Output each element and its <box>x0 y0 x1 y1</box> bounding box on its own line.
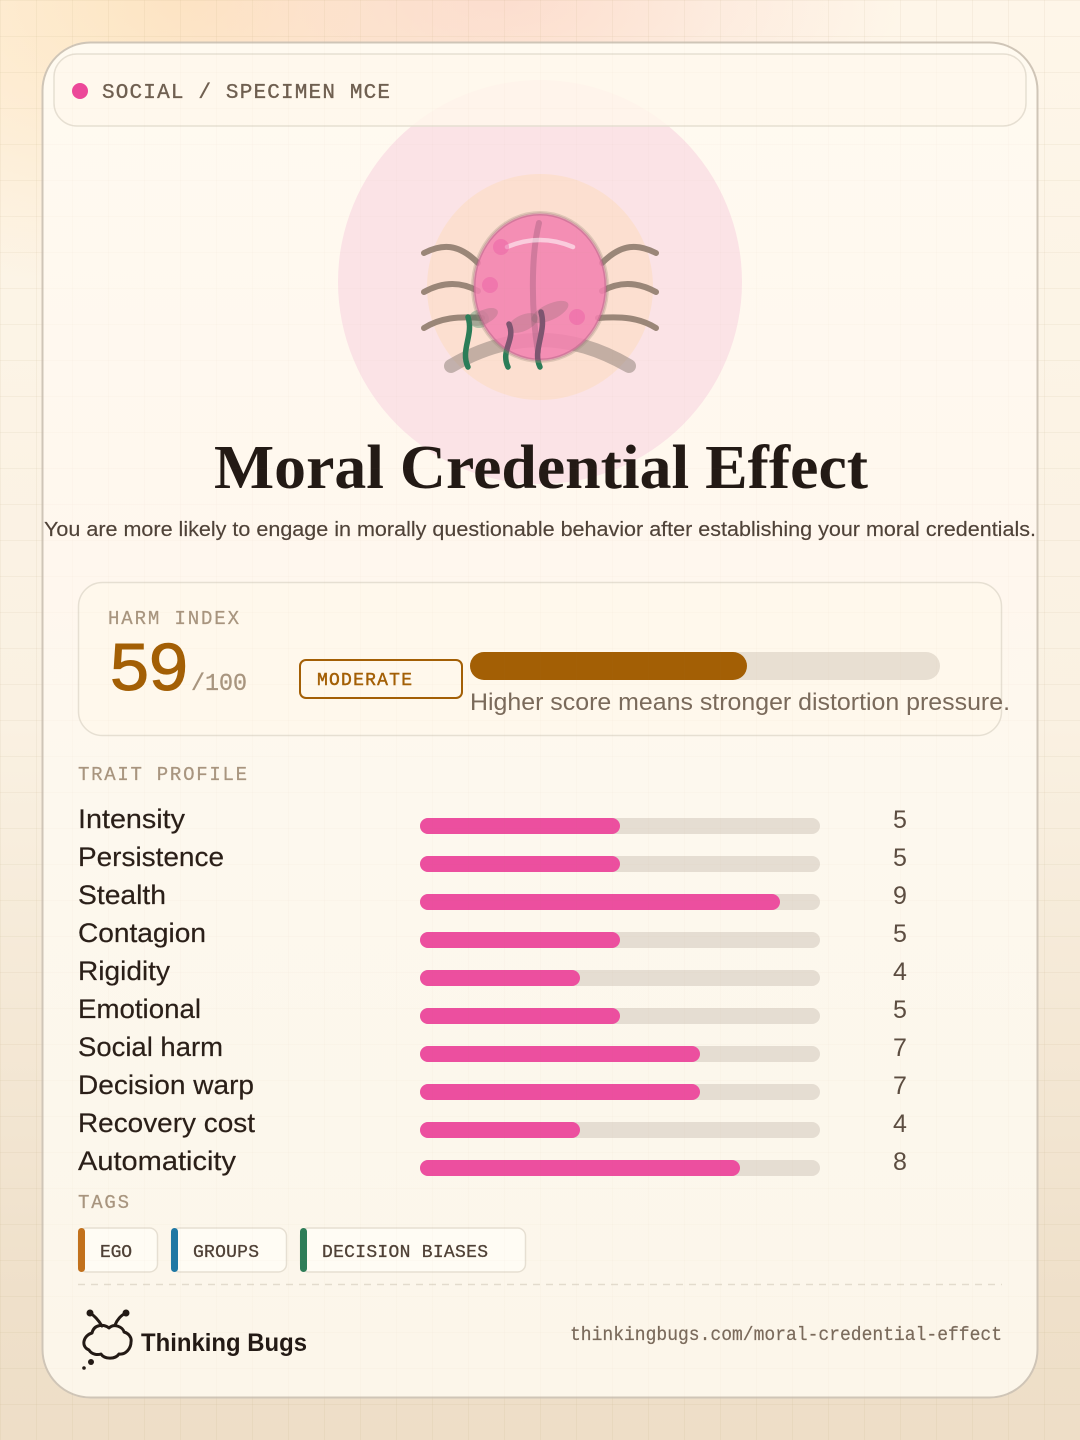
icon: bug illustration <box>424 174 656 400</box>
row: emotional: 5 <box>893 996 907 1024</box>
title: Moral Credential Effect <box>214 434 868 502</box>
tag: ego <box>78 1228 158 1272</box>
harm note: Higher score means stronger distortion pressure. <box>470 689 1010 716</box>
tendrils seen through shell <box>506 312 542 367</box>
tag: decision biases <box>300 1228 526 1272</box>
ground arc <box>451 340 629 366</box>
shell highlight <box>507 240 573 247</box>
row: recovery cost: 4 <box>893 1110 907 1138</box>
row: recovery cost <box>78 1108 907 1138</box>
row: persistence: Persistence <box>78 842 224 872</box>
row: automaticity <box>78 1146 907 1176</box>
icon: status dot <box>72 83 88 99</box>
tag list <box>78 1228 526 1272</box>
row: decision warp <box>78 1070 907 1100</box>
shell centre line <box>533 223 539 352</box>
panel: header strip <box>54 54 1026 126</box>
row: social harm <box>78 1032 907 1062</box>
row: rigidity: Rigidity <box>78 956 171 986</box>
row: contagion <box>78 918 907 948</box>
wing marks <box>467 296 572 337</box>
row: social harm: 7 <box>893 1034 907 1062</box>
tag: decision biases: DECISION BIASES <box>322 1243 488 1263</box>
row: persistence: 5 <box>893 844 907 872</box>
score: 59 <box>110 630 188 705</box>
subtitle: You are more likely to engage in morally questionable behavior after establishing your moral credentials. <box>44 518 1036 541</box>
heading: trait profile: TRAIT PROFILE <box>78 764 247 786</box>
heading: tags: TAGS <box>78 1192 129 1214</box>
panel: harm index <box>78 582 1010 736</box>
row: emotional <box>78 994 907 1024</box>
severity badge: MODERATE <box>317 671 412 691</box>
row: decision warp: 7 <box>893 1072 907 1100</box>
icon: thinking bugs logo <box>82 1310 131 1370</box>
row: rigidity: 4 <box>893 958 907 986</box>
row: decision warp: Decision warp <box>78 1070 254 1100</box>
specimen label: SOCIAL / SPECIMEN MCE <box>102 82 390 105</box>
shell <box>474 214 606 360</box>
row: rigidity <box>78 956 907 986</box>
severity badge <box>300 660 462 698</box>
harm index label: HARM INDEX <box>108 608 240 630</box>
row: contagion: 5 <box>893 920 907 948</box>
row: intensity: Intensity <box>78 804 186 834</box>
tag: groups: GROUPS <box>193 1243 259 1263</box>
row: stealth <box>78 880 907 910</box>
row: social harm: Social harm <box>78 1032 223 1062</box>
row: emotional: Emotional <box>78 994 201 1024</box>
chart: trait bars <box>78 804 907 1176</box>
source url: thinkingbugs.com/moral-credential-effect <box>570 1324 1002 1346</box>
row: contagion: Contagion <box>78 918 206 948</box>
tag: ego: EGO <box>100 1243 132 1263</box>
score maximum: /100 <box>191 671 247 698</box>
green leaf patch <box>469 310 489 328</box>
row: intensity: 5 <box>893 806 907 834</box>
legs <box>424 247 656 328</box>
harm progress bar <box>470 652 940 680</box>
hero backdrop: pink circle <box>338 80 742 484</box>
row: stealth: 9 <box>893 882 907 910</box>
green tendrils <box>465 312 542 367</box>
row: intensity <box>78 804 907 834</box>
row: persistence <box>78 842 907 872</box>
row: stealth: Stealth <box>78 880 166 910</box>
tag: groups <box>171 1228 286 1272</box>
row: automaticity: 8 <box>893 1148 907 1176</box>
brand name: Thinking Bugs <box>141 1329 307 1357</box>
spots <box>482 239 585 325</box>
row: automaticity: Automaticity <box>78 1146 237 1176</box>
row: recovery cost: Recovery cost <box>78 1108 256 1138</box>
